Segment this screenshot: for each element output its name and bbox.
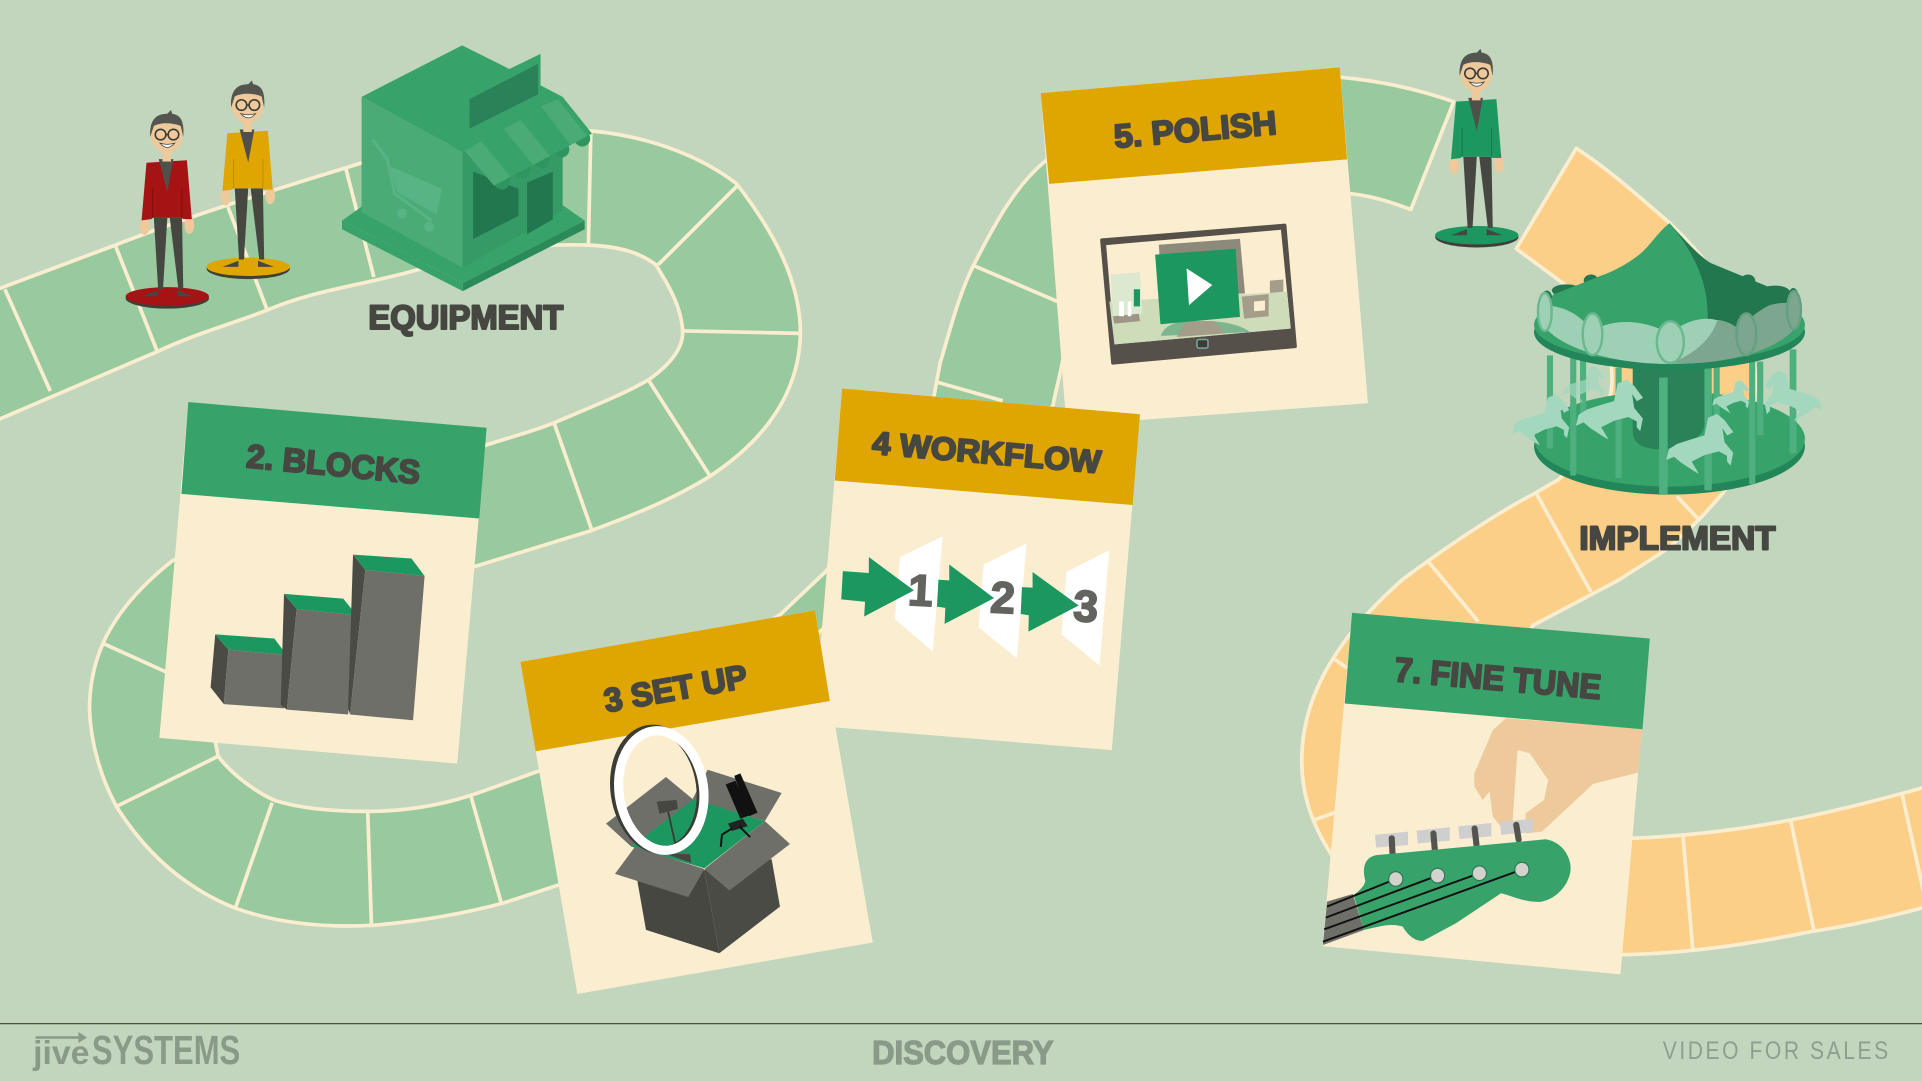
card title: 5. POLISH [1112,105,1278,156]
footer logo: jive systems: jive [32,1035,89,1072]
card title: 2. BLOCKS [245,438,422,492]
icon: guitar headstock [1323,819,1571,945]
card 3: set up [520,610,873,994]
footer logo: jive systems [32,1027,240,1073]
carousel rim [1534,287,1805,370]
icon: numbered arrows: 3 [1072,582,1099,632]
player token: red [126,110,209,309]
icon: numbered arrows: 2 [989,573,1016,623]
card 4: workflow [814,389,1140,750]
icon: numbered arrows: 1 [907,566,934,616]
icon: rising blocks [211,555,425,720]
footer section title: DISCOVERY [872,1035,1054,1072]
carousel floor [1534,391,1805,495]
icon: video tablet [1102,226,1295,363]
icon: open box with ring light and camera [606,723,790,953]
card title: 7. FINE TUNE [1393,651,1603,707]
card 2: blocks [159,402,487,764]
card title: 4 WORKFLOW [871,425,1103,480]
card title: 3 SET UP [601,659,750,720]
card 5: polish [1041,67,1368,425]
player token: yellow [207,81,290,279]
icon: equipment shop [342,45,592,291]
label: equipment: EQUIPMENT [368,299,563,337]
carousel centre column [1633,349,1705,449]
player token: green [1435,49,1518,247]
icon: numbered arrows [841,536,1109,666]
green game path [0,77,1454,926]
icon: hand tuning [1474,718,1642,833]
carousel roof [1538,223,1802,364]
footer divider [0,1023,1922,1024]
carousel rods [1547,349,1796,494]
footer logo: jive systems: SYSTEMS [92,1027,240,1073]
icon: carousel [1513,223,1821,495]
card 7: fine tune [1323,613,1650,974]
label: implement: IMPLEMENT [1579,521,1776,558]
orange game path [1302,148,1922,955]
carousel horses [1513,366,1821,473]
